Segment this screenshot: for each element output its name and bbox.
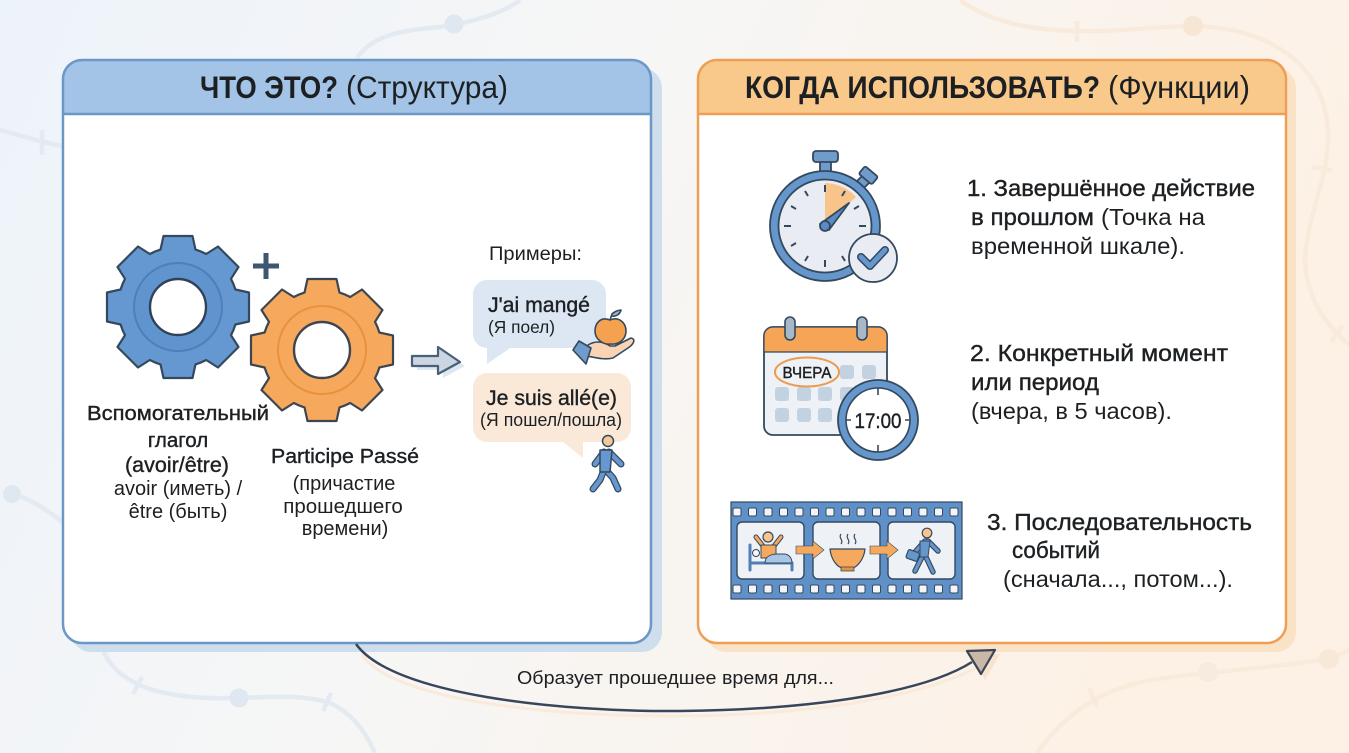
text: function 1 xyxy=(967,175,1255,259)
text: function 2: 2. Конкретный момент xyxy=(970,340,1228,366)
arrow: first step xyxy=(796,541,824,559)
text: function 2 xyxy=(970,340,1228,424)
heading: structure: ЧТО ЭТО? xyxy=(200,69,338,105)
icon: calendar with clock: 17:00 xyxy=(854,410,902,433)
icon: orange gear xyxy=(251,279,393,421)
text: function 1: в прошлом xyxy=(971,204,1094,230)
icon: stopwatch xyxy=(770,151,897,282)
icon: soup bowl xyxy=(830,534,865,571)
text: participe passé: (причастие xyxy=(293,473,395,495)
heading: functions: КОГДА ИСПОЛЬЗОВАТЬ? xyxy=(745,69,1100,105)
text: auxiliary verb: avoir (иметь) / xyxy=(114,478,243,500)
text: participe passé xyxy=(271,445,419,540)
caption: link text: Образует прошедшее время для... xyxy=(517,667,834,688)
arrow: second step xyxy=(870,541,898,559)
example bubble: je suis allé: (Я пошел/пошла) xyxy=(480,410,622,430)
example bubble: j'ai mangé xyxy=(473,280,606,364)
text: auxiliary verb: Вспомогательный xyxy=(87,402,269,425)
icon: apple in hand xyxy=(573,310,634,364)
text: function 1: 1. Завершённое действие xyxy=(967,175,1255,201)
text: auxiliary verb xyxy=(87,402,269,523)
icon: blue gear xyxy=(107,236,249,378)
arrow: link between panels xyxy=(356,644,1000,716)
text: auxiliary verb: (avoir/être) xyxy=(125,453,229,477)
icon: walking person xyxy=(593,436,621,489)
icon: person with briefcase xyxy=(906,528,938,572)
example bubble: j'ai mangé: (Я поел) xyxy=(488,317,555,337)
text: participe passé: времени) xyxy=(302,518,388,540)
text: function 3 xyxy=(987,509,1252,592)
text: participe passé: Participe Passé xyxy=(271,445,419,468)
icon: calendar with clock: ВЧЕРА xyxy=(782,365,832,382)
text: function 2: или период xyxy=(971,369,1099,395)
text: auxiliary verb: être (быть) xyxy=(129,501,227,523)
arrow: to examples xyxy=(412,347,465,378)
icon: plus xyxy=(253,253,279,279)
example bubble: je suis allé xyxy=(473,373,631,458)
heading: functions: (Функции) xyxy=(1108,69,1250,105)
text: function 1: (Точка на xyxy=(1101,204,1206,230)
text: function 3: (сначала..., потом...). xyxy=(1003,566,1233,592)
example bubble: j'ai mangé: J'ai mangé xyxy=(488,293,590,317)
text: function 3: 3. Последовательность xyxy=(987,509,1252,535)
example bubble: je suis allé: Je suis allé(e) xyxy=(486,386,617,410)
text: function 2: (вчера, в 5 часов). xyxy=(971,398,1172,424)
text: participe passé: прошедшего xyxy=(283,495,403,518)
heading: structure: (Структура) xyxy=(346,69,508,105)
panel: functions xyxy=(698,60,1296,652)
icon: calendar with clock xyxy=(764,317,918,460)
panel: structure xyxy=(63,60,662,652)
text: examples label: Примеры: xyxy=(489,243,582,265)
heading: structure xyxy=(200,69,508,105)
text: function 3: событий xyxy=(1012,537,1100,563)
icon: film strip xyxy=(731,502,962,599)
icon: waking in bed xyxy=(750,532,792,570)
text: auxiliary verb: глагол xyxy=(148,429,208,452)
text: function 1: временной шкале). xyxy=(971,233,1185,259)
